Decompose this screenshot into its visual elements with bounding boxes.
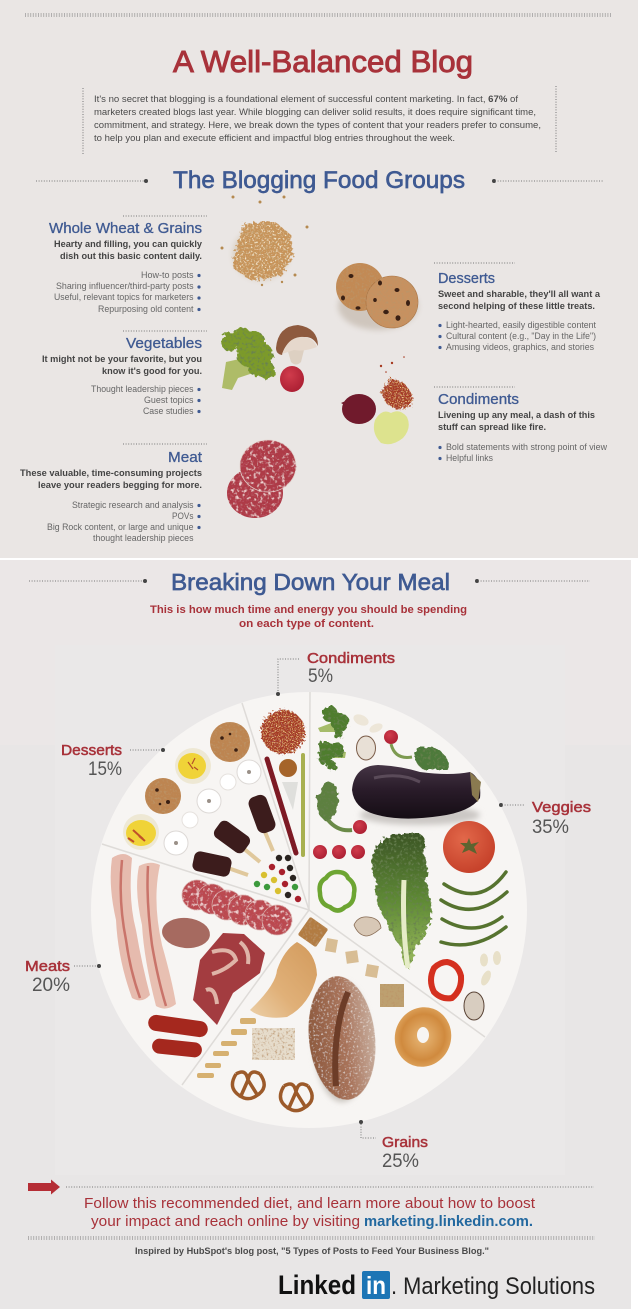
pita — [250, 942, 317, 1018]
panel: whole wheat and grains: dish out this basic content daily. — [60, 251, 202, 262]
lettuce — [372, 834, 431, 968]
panel: whole wheat and grains: Repurposing old content — [98, 304, 194, 314]
label: grains 25%: Grains — [382, 1134, 428, 1151]
logo: linkedin marketing solutions: in — [366, 1272, 386, 1300]
panel: condiments: Condiments — [438, 391, 519, 408]
panel: meat: POVs — [172, 511, 194, 521]
crackers — [298, 917, 328, 947]
intro paragraph: commitment, and strategy. Here, we break down the types of content that your readers prefer to consume, — [94, 120, 541, 131]
label: desserts 15%: 15% — [88, 759, 122, 780]
label: meats 20%: Meats — [25, 958, 70, 975]
lower section background — [0, 560, 631, 1309]
panel: meat: thought leadership pieces — [93, 533, 194, 543]
eggplant — [360, 805, 480, 825]
subtitle — [150, 604, 467, 630]
radish and leaves — [384, 730, 398, 744]
rice square — [252, 1028, 295, 1060]
logo: linkedin marketing solutions: . Marketing Solutions — [391, 1273, 595, 1300]
chart: plate pie — [91, 692, 527, 1128]
call to action: marketing.linkedin.com. — [364, 1214, 533, 1230]
panel: condiments: Livening up any meal, a dash of this — [438, 410, 595, 421]
intro paragraph: to help you plan and execute efficient and impactful blog entries throughout the week. — [94, 133, 455, 144]
panel: meat: leave your readers begging for more. — [38, 480, 202, 491]
arrow — [28, 1180, 60, 1194]
icon: mushroom — [276, 325, 318, 364]
label: meats 20% — [25, 958, 101, 996]
panel: desserts — [434, 263, 601, 352]
panel: desserts: second helping of these little treats. — [438, 301, 595, 312]
pretzels — [232, 1072, 312, 1111]
panel: whole wheat and grains: Useful, relevant topics for marketers — [54, 292, 194, 302]
garlic and mushroom — [352, 712, 370, 728]
slice dividers — [102, 692, 485, 1085]
mushroom — [354, 917, 381, 936]
subtitle: This is how much time and energy you should be spending — [150, 604, 467, 616]
panel: desserts: Amusing videos, graphics, and stories — [446, 342, 595, 352]
call to action — [84, 1196, 535, 1230]
panel: vegetables: Vegetables — [126, 335, 202, 352]
panel: vegetables: It might not be your favorite, but you — [42, 354, 202, 365]
slice: desserts food — [123, 722, 301, 902]
panel: vegetables: Guest topics — [144, 395, 194, 405]
icon: cookies — [336, 263, 418, 330]
green pepper — [320, 872, 354, 910]
panel: desserts: Cultural content (e.g., "Day in the Life") — [446, 331, 596, 341]
panel: condiments — [434, 387, 608, 463]
broccoli — [318, 722, 338, 732]
label: veggies 35% — [499, 799, 591, 838]
panel: vegetables — [42, 331, 207, 416]
label: veggies 35%: 35% — [532, 817, 569, 838]
slice: veggies food — [313, 706, 507, 1020]
panel: meat — [20, 444, 207, 543]
bread loaf — [314, 982, 370, 1102]
salami row — [182, 880, 292, 935]
title: A Well-Balanced Blog — [173, 44, 473, 79]
panel: vegetables: Case studies — [143, 406, 194, 416]
panel: whole wheat and grains — [49, 216, 207, 314]
label: condiments 5%: 5% — [308, 666, 333, 687]
icon: condiments group — [341, 356, 413, 444]
label: desserts 15%: Desserts — [61, 742, 122, 759]
heading: the blogging food groups: The Blogging Food Groups — [173, 167, 465, 194]
label: grains 25%: 25% — [382, 1151, 419, 1172]
sausages — [147, 1014, 209, 1038]
slice: meats food — [111, 854, 292, 1058]
label: condiments 5%: Condiments — [307, 650, 395, 667]
label: desserts 15% — [61, 742, 165, 780]
intro paragraph: It's no secret that blogging is a foundational element of successful content marketing. In fact, 67% of — [94, 94, 518, 105]
panel: meat: Strategic research and analysis — [72, 500, 194, 510]
heading: the blogging food groups — [36, 167, 604, 194]
subtitle: on each type of content. — [239, 618, 374, 630]
intro paragraph: marketers created blogs last year. While blogging can deliver solid results, it does require significant time, — [94, 107, 536, 118]
logo: linkedin marketing solutions — [278, 1270, 595, 1300]
leaf with radish — [317, 783, 338, 820]
slice: grains food — [197, 917, 460, 1111]
icon: grains pile — [220, 196, 308, 286]
panel: condiments: Bold statements with strong point of view — [446, 442, 608, 452]
popsicles — [191, 793, 277, 878]
panel: desserts: Desserts — [438, 270, 495, 287]
call to action: Follow this recommended diet, and learn more about how to boost — [84, 1196, 535, 1212]
panel: condiments: stuff can spread like fire. — [438, 422, 546, 433]
intro paragraph — [94, 94, 541, 144]
panel: condiments: Helpful links — [446, 453, 494, 463]
bacon — [111, 854, 150, 1000]
green beans — [441, 872, 507, 945]
label: condiments 5% — [276, 650, 395, 696]
plate — [91, 692, 527, 1128]
credit line: Inspired by HubSpot's blog post, "5 Types of Posts to Feed Your Business Blog." — [135, 1246, 489, 1256]
page background — [0, 0, 638, 558]
panel: meat: These valuable, time-consuming projects — [20, 468, 202, 479]
label: meats 20%: 20% — [32, 975, 70, 996]
garlic — [480, 954, 488, 966]
logo: linkedin marketing solutions: Linked — [278, 1270, 356, 1300]
panel: desserts: Light-hearted, easily digestible content — [446, 320, 597, 330]
panel: vegetables: Thought leadership pieces — [91, 384, 194, 394]
icon: radish — [280, 366, 304, 392]
radishes — [313, 845, 327, 859]
call to action: your impact and reach online by visiting — [91, 1214, 360, 1230]
icon: broccoli — [221, 328, 275, 390]
candies — [254, 855, 301, 902]
icon: salami slices — [227, 440, 296, 518]
panel: whole wheat and grains: Hearty and filling, you can quickly — [54, 239, 203, 250]
bagel — [386, 999, 460, 1075]
slice: condiments food — [261, 710, 305, 855]
mushroom — [464, 992, 484, 1020]
label: veggies 35%: Veggies — [532, 799, 591, 816]
panel: meat: Meat — [168, 449, 203, 466]
pasta — [197, 1018, 256, 1078]
panel: whole wheat and grains: Sharing influencer/third-party posts — [56, 281, 194, 291]
panel: whole wheat and grains: Whole Wheat & Grains — [49, 220, 202, 237]
roast slice — [161, 916, 211, 950]
panel: whole wheat and grains: How-to posts — [141, 270, 194, 280]
panel: meat: Big Rock content, or large and unique — [47, 522, 194, 532]
heading: breaking down your meal — [29, 569, 590, 595]
panel: desserts: Sweet and sharable, they'll all want a — [438, 289, 601, 300]
panel: vegetables: know it's good for you. — [102, 366, 202, 377]
tomato — [443, 821, 495, 873]
label: grains 25% — [359, 1120, 428, 1172]
red pepper — [431, 962, 461, 998]
steak — [193, 933, 265, 1025]
heading: breaking down your meal: Breaking Down Your Meal — [171, 569, 450, 595]
